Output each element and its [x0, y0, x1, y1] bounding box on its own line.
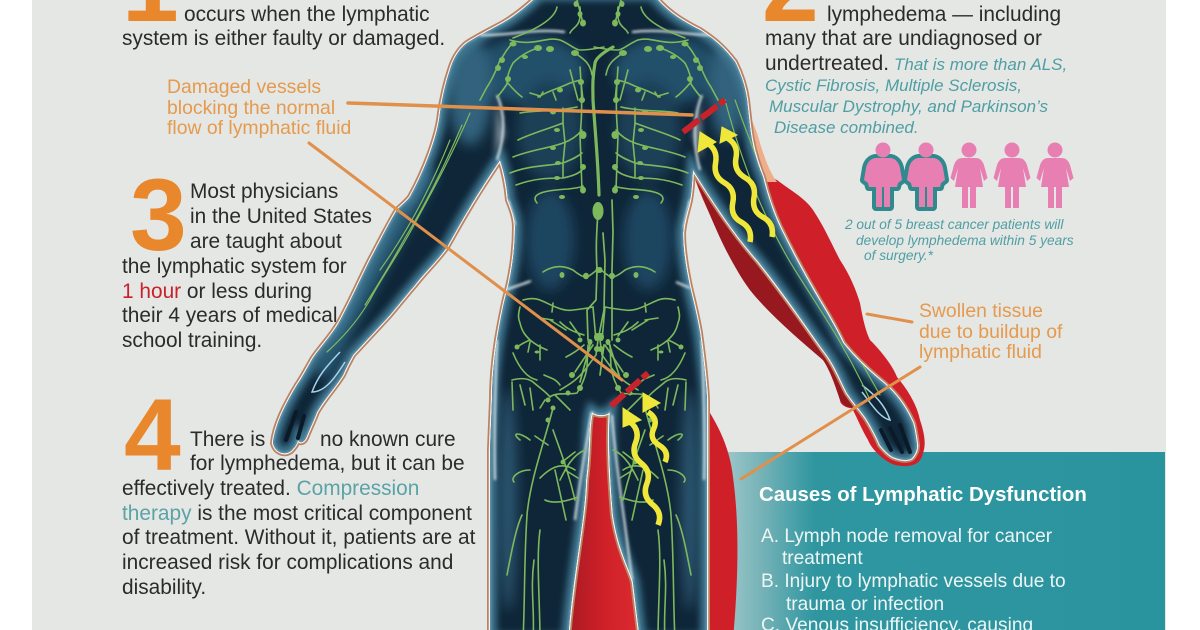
callout: swollen tissue: Swollen tissue — [919, 300, 1043, 322]
text block 4: disability. — [122, 576, 206, 599]
text block 3: are taught about — [190, 230, 342, 253]
pictogram caption: develop lymphedema within 5 years — [856, 233, 1074, 248]
lymphatic vessels: right half — [594, 0, 718, 630]
pictogram caption: of surgery.* — [864, 248, 934, 263]
text block 2 — [762, 0, 1067, 137]
figure 2 highlighted — [907, 142, 945, 207]
causes list: trauma or infection — [786, 594, 944, 615]
text block 3: their 4 years of medical — [122, 304, 337, 327]
teal comparison note — [765, 55, 1067, 137]
teal comparison note: Muscular Dystrophy, and Parkinson’s — [769, 97, 1049, 116]
text block 4: increased risk for complications and — [122, 551, 453, 574]
callout: damaged vessels: Damaged vessels — [167, 76, 321, 98]
pictogram caption — [844, 217, 1074, 263]
text block 1: system is either faulty or damaged. — [122, 27, 445, 50]
text block 4 — [122, 378, 476, 599]
callout: swollen tissue — [919, 300, 1063, 363]
text block 3: school training. — [122, 329, 262, 352]
text block 2: many that are undiagnosed or — [765, 27, 1042, 50]
callout: swollen tissue: lymphatic fluid — [919, 341, 1042, 363]
teal comparison note: Cystic Fibrosis, Multiple Sclerosis, — [765, 76, 1022, 95]
callout: damaged vessels — [167, 76, 351, 139]
wrist, hand and finger details — [286, 412, 910, 452]
text block 4: no known cure — [320, 428, 456, 451]
text block 2: undertreated. — [765, 52, 889, 75]
text block 4: for lymphedema, but it can be — [190, 452, 465, 475]
figure 1 highlighted — [864, 142, 902, 207]
figure 5 — [1036, 142, 1074, 208]
human body figure with lymphatic system — [260, 0, 940, 630]
text block 3: Most physicians — [190, 180, 338, 203]
text block 3: the lymphatic system for — [122, 255, 347, 278]
pictogram caption: 2 out of 5 breast cancer patients will — [844, 217, 1064, 232]
muscle shading — [320, 35, 746, 610]
blockage mark: arm — [683, 100, 725, 132]
text block 3: 1 hour or less during — [122, 280, 312, 303]
figure 3 — [950, 142, 988, 208]
swollen arm in red — [693, 110, 925, 466]
blockage mark: groin — [611, 373, 648, 406]
text block 3 — [122, 158, 372, 352]
text block 4: There is — [190, 428, 265, 451]
callout: damaged vessels: flow of lymphatic fluid — [167, 117, 351, 139]
causes list: B. Injury to lymphatic vessels due to — [761, 571, 1066, 592]
leader lines — [309, 103, 920, 479]
text block 1: occurs when the lymphatic — [184, 3, 430, 26]
text block 4: effectively treated. Compression — [122, 477, 419, 500]
panel: causes of lymphatic dysfunction — [727, 452, 1165, 630]
text block 3: in the United States — [190, 205, 372, 228]
teal comparison note: That is more than ALS, — [894, 55, 1067, 74]
figure 4 — [994, 142, 1030, 208]
callout: damaged vessels: blocking the normal — [167, 97, 335, 119]
causes list: A. Lymph node removal for cancer — [761, 526, 1053, 547]
callout: swollen tissue: due to buildup of — [919, 321, 1063, 343]
text block 4: of treatment. Without it, patients are at — [122, 526, 476, 549]
joint and skin highlights — [480, 31, 716, 580]
teal comparison note: Disease combined. — [774, 118, 919, 137]
yellow arrows: arm — [698, 127, 772, 242]
text block 1 — [122, 0, 445, 50]
text block 4: therapy is the most critical component — [122, 502, 472, 525]
numeral 4: 4 — [124, 378, 181, 492]
yellow arrows: leg — [623, 393, 666, 525]
causes list: treatment — [782, 548, 863, 569]
numeral 3: 3 — [130, 158, 187, 272]
lymphatic vessels: left half — [480, 0, 604, 630]
text block 2: lymphedema — including — [827, 3, 1061, 26]
thoracic duct and central vessels — [327, 47, 880, 400]
panel heading: Causes of Lymphatic Dysfunction — [759, 484, 1087, 506]
swollen leg in red — [568, 405, 737, 630]
causes list — [761, 526, 1066, 630]
pictogram: 2 of 5 patients — [864, 142, 1074, 208]
